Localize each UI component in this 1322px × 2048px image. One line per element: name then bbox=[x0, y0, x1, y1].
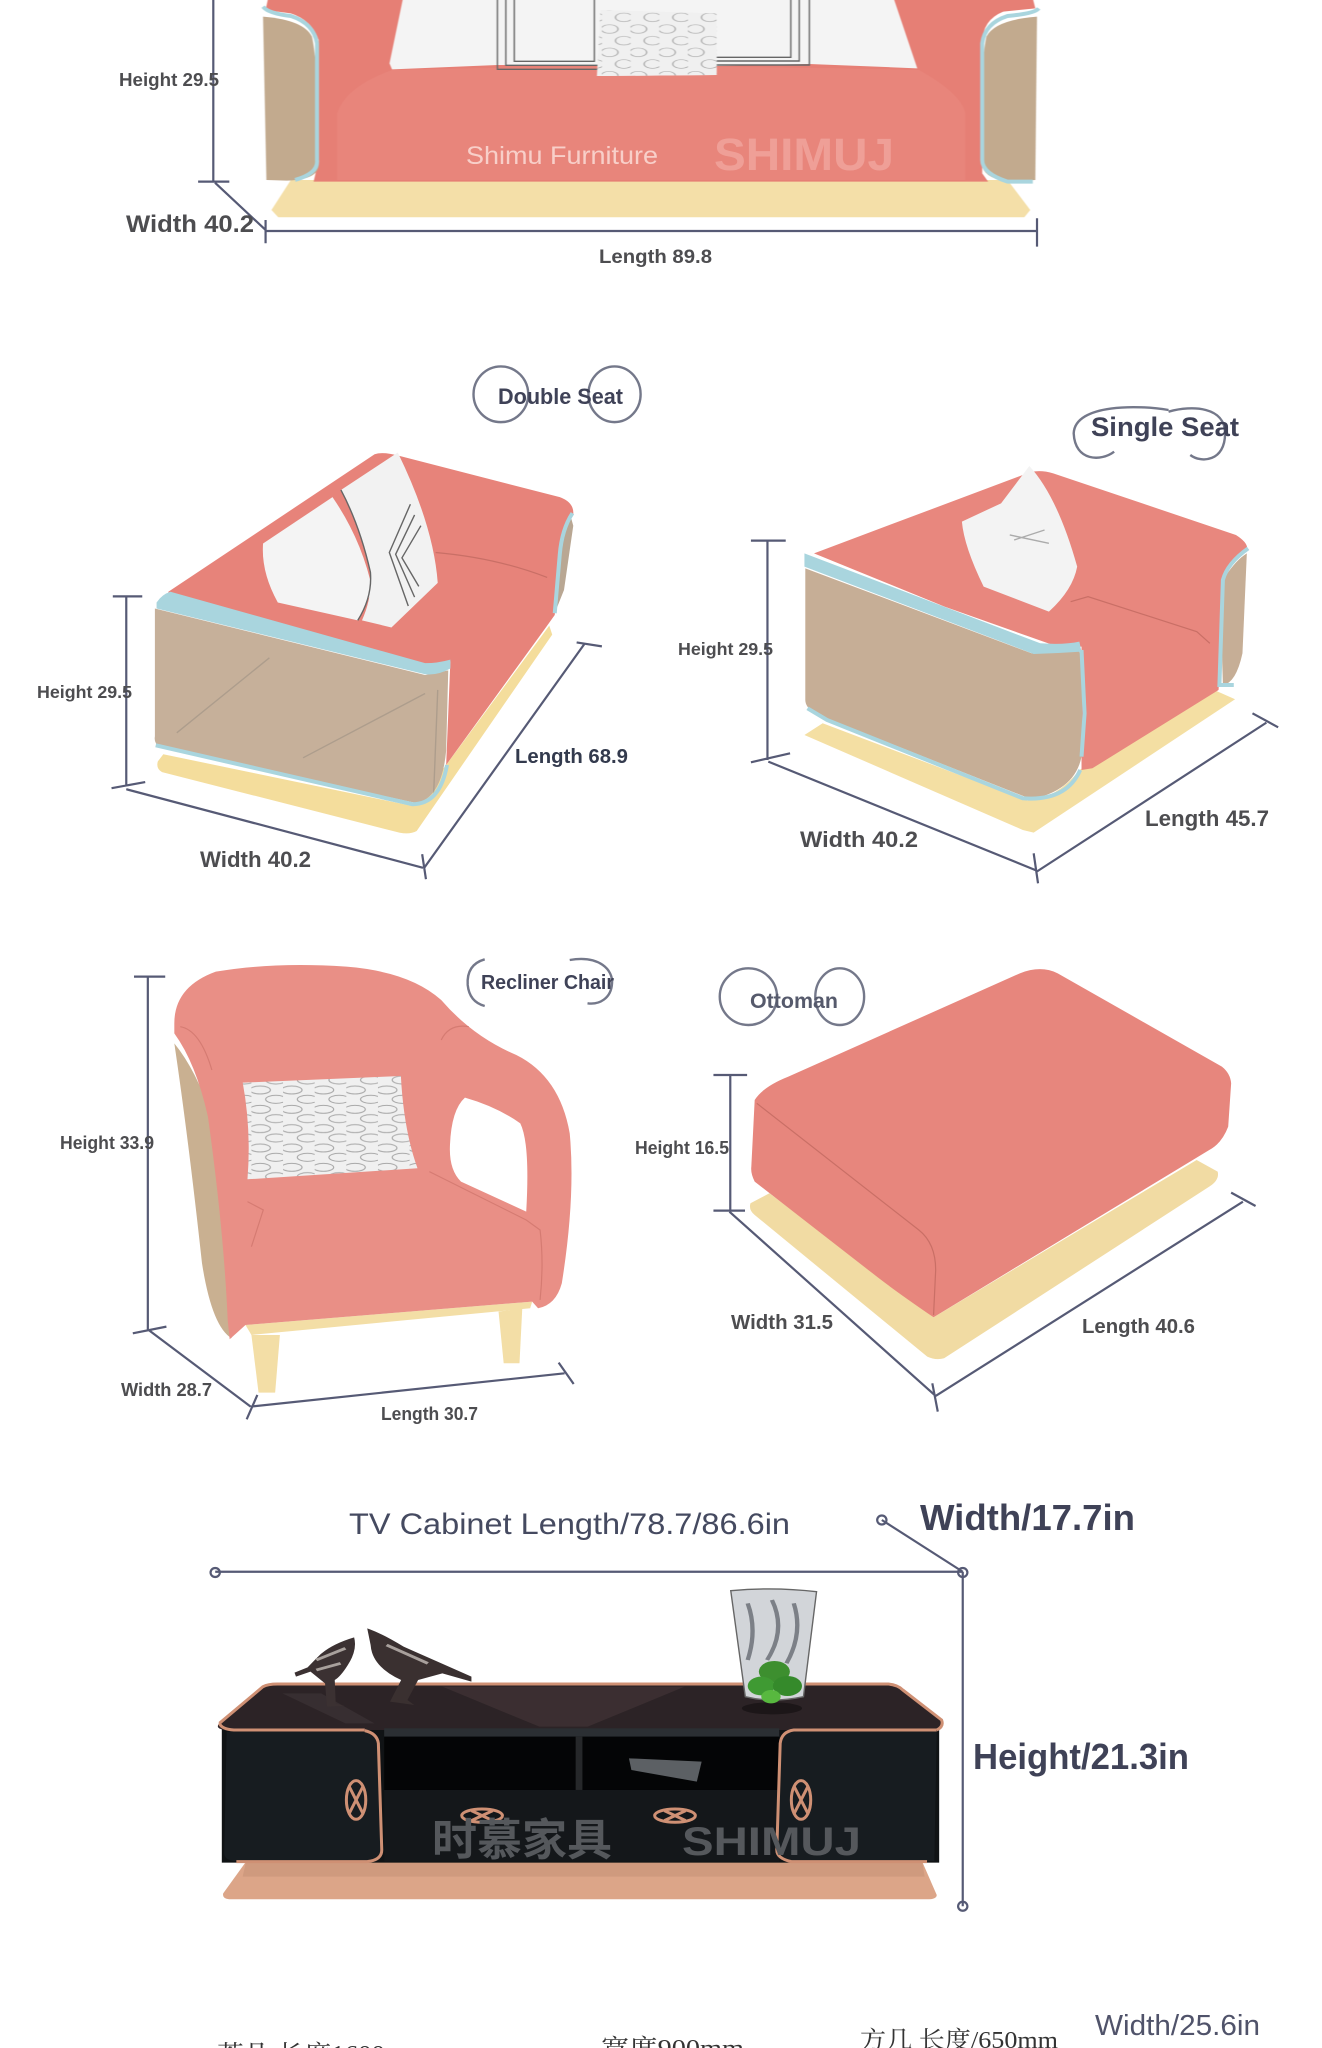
panel: ottoman bbox=[635, 968, 1256, 1412]
single seat sofa drawing bbox=[804, 466, 1248, 833]
label: length: Length 68.9 bbox=[515, 746, 628, 768]
badge: single seat rings bbox=[1074, 407, 1225, 459]
panel: double seat bbox=[37, 366, 641, 879]
bottom cropped captions bbox=[217, 2010, 1260, 2048]
ottoman dimension lines bbox=[713, 1075, 1256, 1412]
title: Ottoman: Ottoman bbox=[750, 990, 838, 1013]
label: height: Height 29.5 bbox=[678, 639, 773, 659]
badge: ottoman rings bbox=[720, 968, 864, 1025]
label: length: Length 89.8 bbox=[599, 247, 712, 268]
panel: single seat bbox=[678, 407, 1278, 883]
label: length: Length 30.7 bbox=[381, 1404, 478, 1424]
label: cabinet height: Height/21.3in bbox=[973, 1736, 1189, 1777]
recliner chair drawing bbox=[174, 965, 572, 1393]
label: table width: Width/25.6in bbox=[1095, 2010, 1260, 2042]
ottoman drawing bbox=[750, 969, 1231, 1359]
label: height: Height 29.5 bbox=[37, 682, 132, 702]
dimension lines bbox=[198, 0, 1037, 247]
green fruit bbox=[759, 1661, 790, 1682]
label: height: Height 16.5 bbox=[635, 1138, 729, 1158]
label: cabinet width: Width/17.7in bbox=[920, 1497, 1135, 1538]
panel: recliner chair bbox=[60, 959, 614, 1424]
glass vase bbox=[742, 1702, 802, 1714]
label: TV cabinet length: TV Cabinet Length/78.7/86.6in bbox=[349, 1508, 790, 1541]
label: width: Width 28.7 bbox=[121, 1379, 212, 1400]
label: length: Length 40.6 bbox=[1082, 1316, 1195, 1338]
double seat sofa drawing bbox=[155, 452, 573, 833]
left door bbox=[224, 1732, 382, 1861]
panel: three-seat sofa bbox=[119, 0, 1039, 268]
sofa drawing bbox=[263, 0, 1039, 217]
single seat dimension lines bbox=[751, 541, 1278, 883]
label: width: Width 40.2 bbox=[200, 847, 311, 872]
TV cabinet dimension lines bbox=[211, 1516, 967, 1911]
panel: TV cabinet bbox=[211, 1497, 1189, 1911]
cabinet body bbox=[222, 1727, 939, 1863]
label: height: Height 29.5 bbox=[119, 70, 219, 90]
right door bbox=[777, 1730, 937, 1861]
label: height: Height 33.9 bbox=[60, 1133, 154, 1153]
cabinet top bbox=[218, 1684, 942, 1730]
watermark: SHIMUJ: SHIMUJ bbox=[682, 1820, 861, 1864]
recliner dimension lines bbox=[133, 977, 574, 1419]
label: length: Length 45.7 bbox=[1145, 806, 1269, 831]
title: Single Seat: Single Seat bbox=[1091, 412, 1239, 442]
badge: double seat rings bbox=[474, 366, 641, 422]
watermark: Chinese brand: 时慕家具 bbox=[432, 1816, 612, 1865]
watermark: SHIMUJ: SHIMUJ bbox=[714, 129, 894, 180]
handles bbox=[346, 1781, 366, 1819]
TV cabinet drawing bbox=[218, 1589, 942, 1899]
cabinet base bbox=[223, 1862, 937, 1899]
watermark: Shimu Furniture: Shimu Furniture bbox=[466, 142, 658, 170]
label: width: Width 40.2 bbox=[126, 211, 254, 238]
badge: recliner chair rings bbox=[468, 959, 612, 1006]
label: width: Width 31.5 bbox=[731, 1312, 833, 1334]
bird figurines bbox=[295, 1637, 355, 1707]
title: Recliner Chair: Recliner Chair bbox=[481, 972, 614, 994]
title: Double Seat: Double Seat bbox=[498, 384, 624, 409]
label: width: Width 40.2 bbox=[800, 827, 918, 852]
shelf openings bbox=[384, 1728, 779, 1737]
double seat dimension lines bbox=[112, 596, 602, 879]
